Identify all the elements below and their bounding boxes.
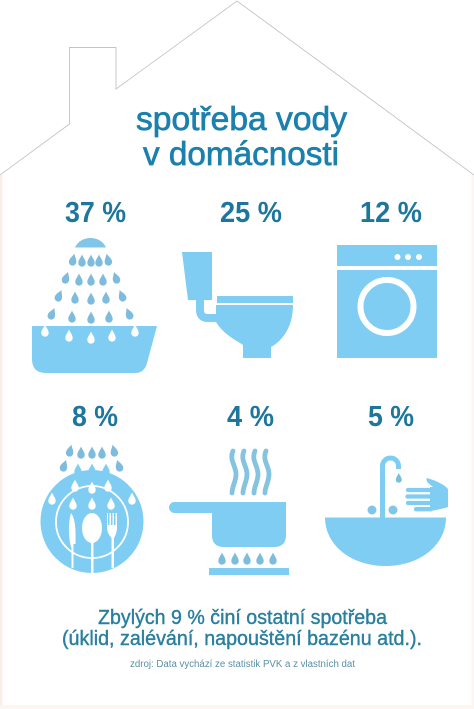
- percentage 37: 37 %: [65, 197, 126, 229]
- panel: dishes 8 %: [40, 401, 144, 573]
- panel: washing machine 12 %: [337, 197, 437, 358]
- icon: pot on burner: [169, 451, 289, 575]
- percentage 8: 8 %: [72, 401, 118, 433]
- icon: plate and cutlery under water: [40, 444, 144, 573]
- percentage 4: 4 %: [227, 401, 274, 433]
- percentage 12: 12 %: [360, 197, 422, 229]
- percentage 25: 25 %: [220, 197, 282, 229]
- panel: cooking 4 %: [169, 401, 289, 575]
- panel: toilet 25 %: [182, 197, 293, 358]
- title: spotřeba vody: [136, 100, 347, 137]
- house outline: [0, 1, 474, 175]
- icon: washing machine: [337, 245, 437, 358]
- panel: shower 37 %: [32, 197, 157, 373]
- title: v domácnosti: [143, 135, 339, 172]
- percentage 5: 5 %: [368, 401, 414, 433]
- title: [136, 100, 347, 172]
- closing note: [62, 607, 422, 650]
- icon: toilet: [182, 252, 293, 358]
- panel: handwashing 5 %: [325, 401, 448, 566]
- closing note: Zbylých 9 % činí ostatní spotřeba: [98, 607, 388, 629]
- icon: shower over basin: [32, 238, 157, 373]
- source: zdroj: Data vychází ze statistik PVK a z vlastních dat: [130, 659, 355, 670]
- icon: sink with faucet and hand: [325, 458, 448, 566]
- closing note: (úklid, zalévání, napouštění bazénu atd.).: [62, 628, 422, 650]
